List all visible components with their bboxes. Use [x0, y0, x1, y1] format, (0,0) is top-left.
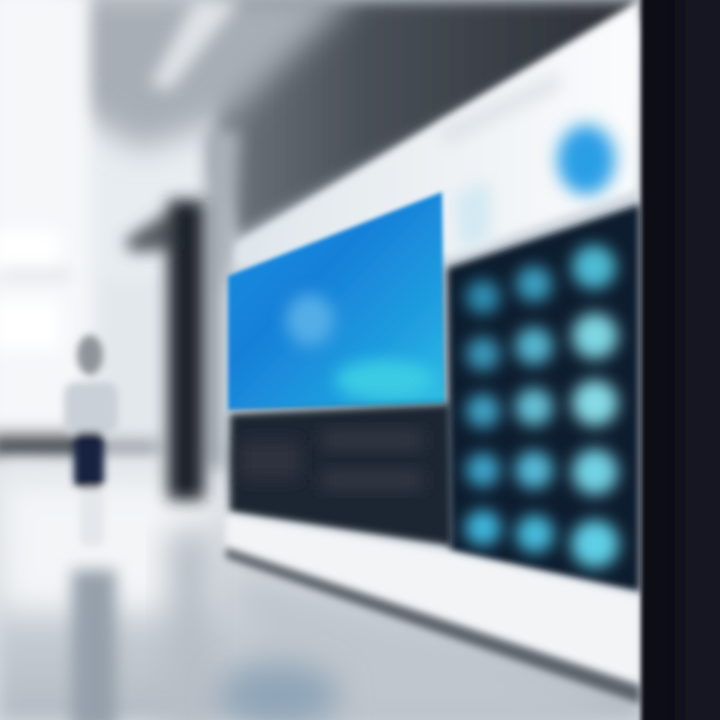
- icon grid: [465, 245, 619, 568]
- dark lower panel: [230, 404, 452, 546]
- white top panel: [236, 0, 640, 266]
- floor: [0, 462, 640, 720]
- blue screen: [228, 192, 445, 410]
- person walking: [64, 335, 118, 546]
- windows on the left: [0, 0, 160, 456]
- ceiling light: [150, 0, 240, 90]
- blue circle icon: [554, 118, 622, 198]
- white bottom ledge: [226, 514, 640, 704]
- icon grid panel: [447, 204, 640, 592]
- dark column: [125, 200, 204, 500]
- black right edge: [641, 0, 720, 720]
